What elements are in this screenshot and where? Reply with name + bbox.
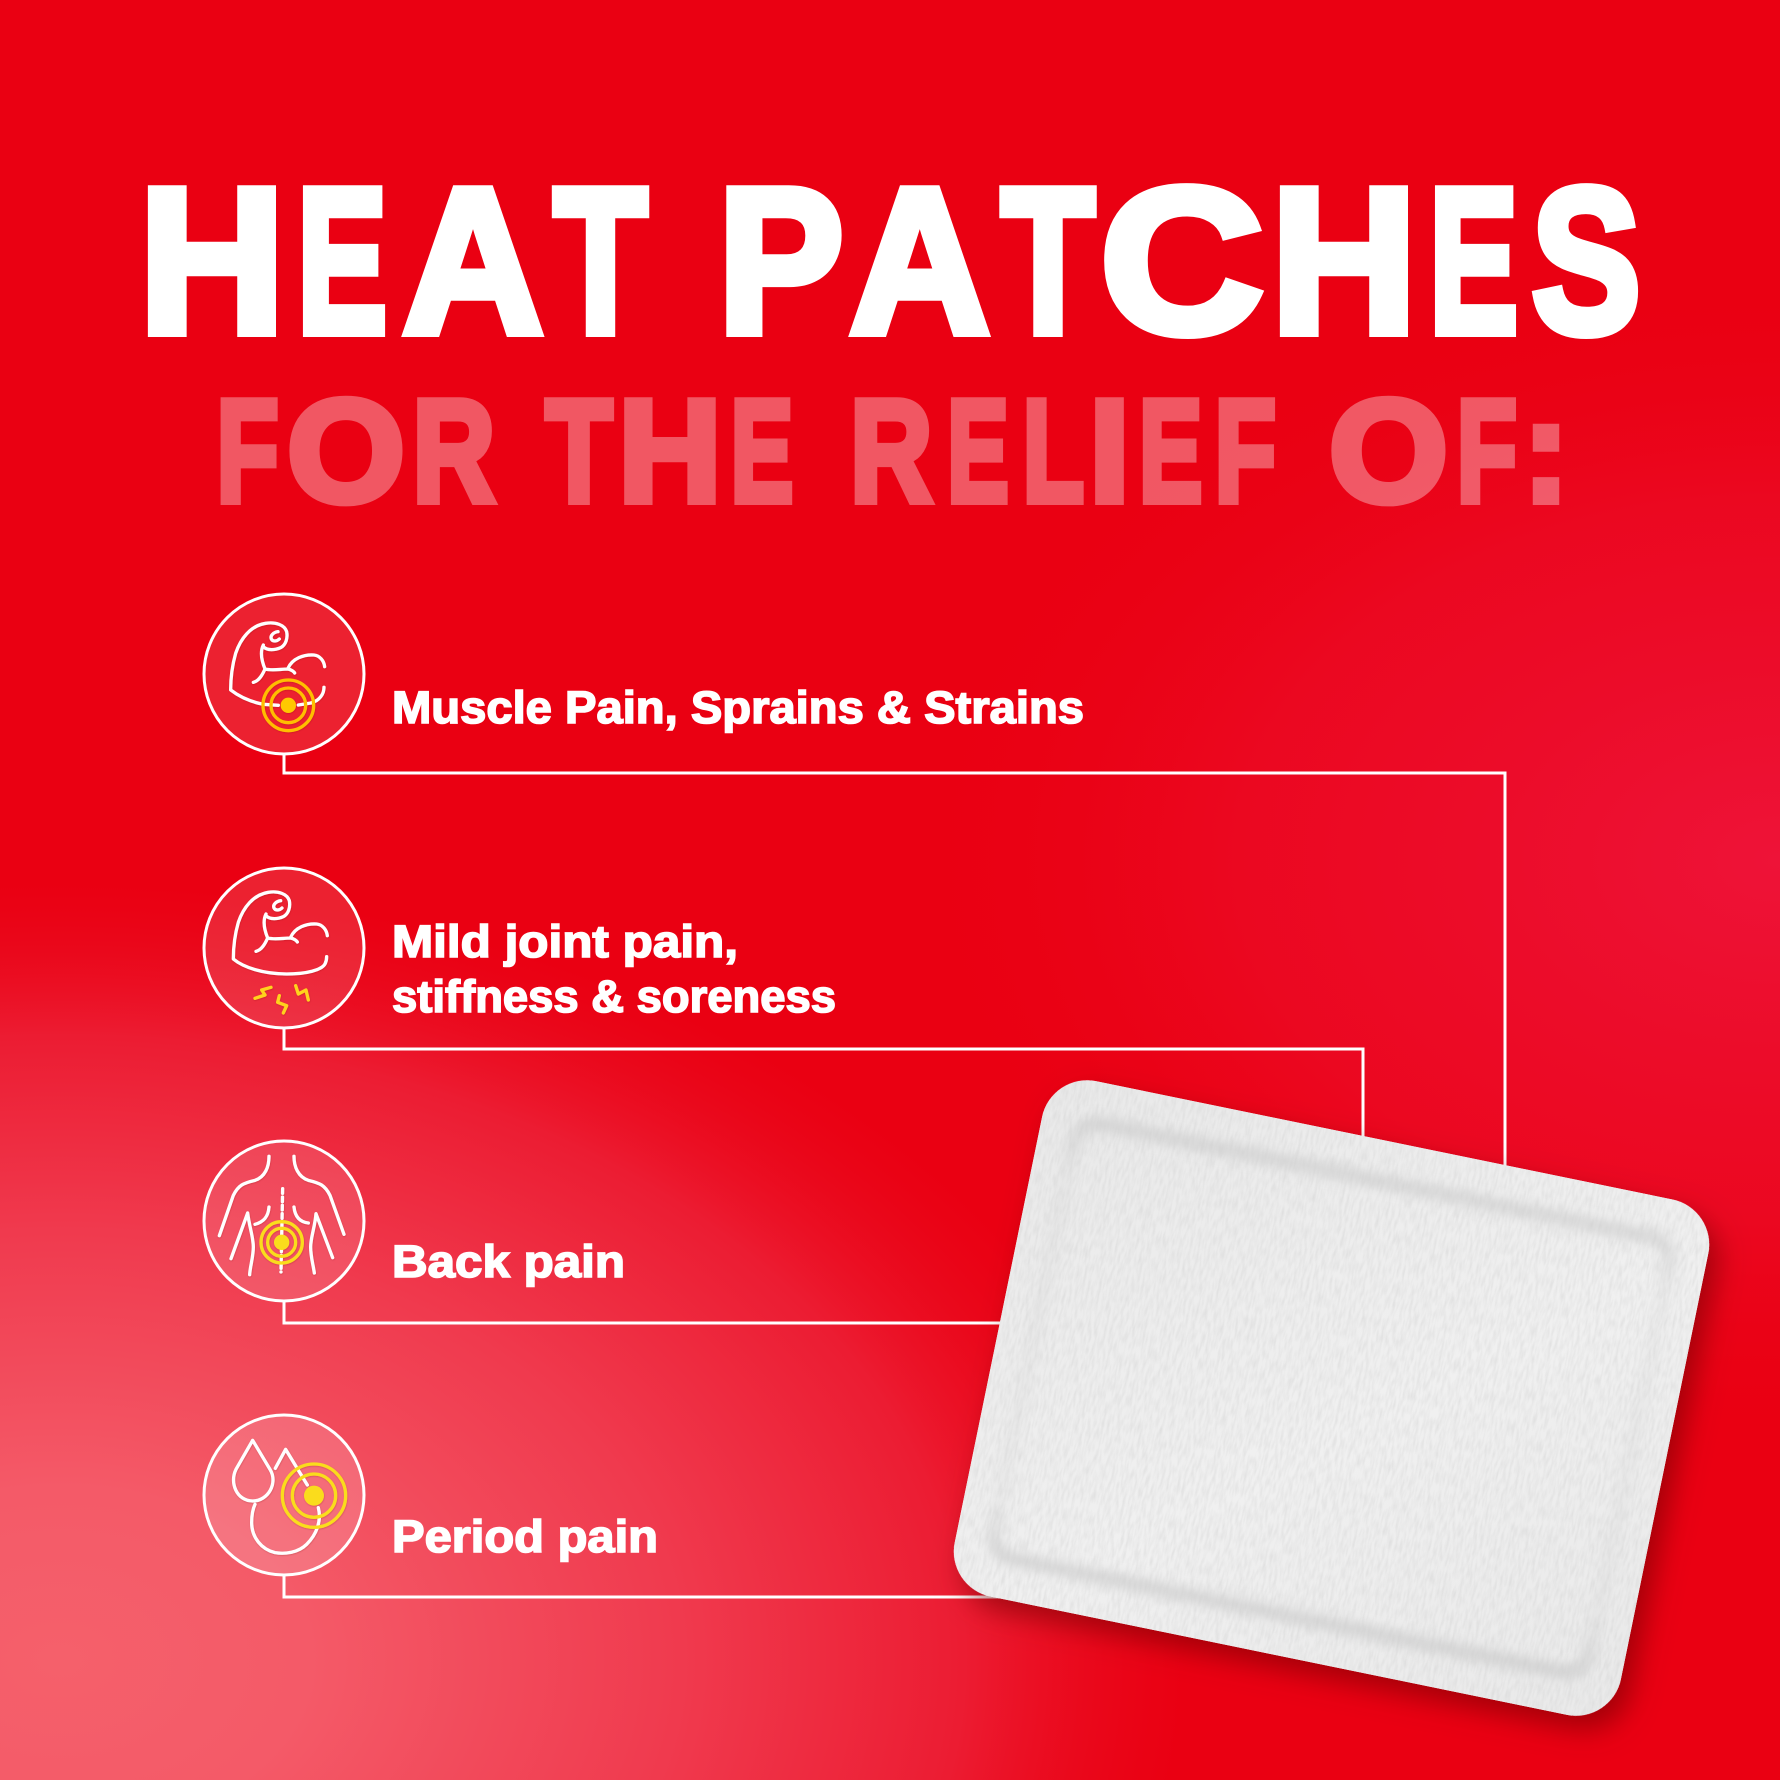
subtitle: for the relief of: T [546,370,612,532]
subtitle: for the relief of: I [1090,370,1130,532]
subtitle: for the relief of: E [731,370,793,532]
label: mild joint pain: Mild joint pain, [392,916,738,967]
icon: muscle with bolts [204,868,364,1028]
subtitle: for the relief of: O [287,370,405,532]
title: heat patches: T [1001,146,1095,376]
title: heat patches: H [139,146,285,376]
icon: back with target [204,1141,364,1301]
icon: drops with target [204,1415,364,1575]
subtitle: for the relief of: F [1215,370,1276,532]
label: mild joint pain [392,916,836,1022]
label: period pain: Period pain [392,1511,658,1562]
connector: period pain to patch [284,1575,1010,1597]
subtitle: for the relief of: F [217,370,279,532]
title: heat patches: S [1532,146,1640,376]
subtitle: for the relief of: : [1524,370,1568,532]
title: heat patches: H [1271,146,1417,376]
subtitle: for the relief of: E [947,370,1009,532]
title: heat patches: E [1429,146,1518,376]
subtitle: for the relief of: O [1329,370,1448,532]
connector: back pain to patch [284,1302,1010,1323]
title: heat patches: A [850,146,990,376]
subtitle: for the relief of: R [850,370,932,532]
subtitle: for the relief of: L [1023,370,1084,532]
heat patch [946,1072,1717,1724]
subtitle: for the relief of: F [1457,370,1517,532]
label: back pain: Back pain [392,1236,625,1287]
title: heat patches: A [403,146,543,376]
subtitle: for the relief of: H [619,370,721,532]
title: heat patches: E [297,146,387,376]
title: heat patches: P [718,146,844,376]
subtitle: for the relief of [217,370,1569,532]
connector: muscle pain to patch [284,755,1505,1170]
label: muscle pain: Muscle Pain, Sprains & Strains [392,682,1084,733]
label: mild joint pain: stiffness & soreness [392,971,836,1022]
connector: joint pain to patch [284,1028,1363,1140]
title: heat patches: C [1100,146,1263,376]
icon: muscle with target [204,594,364,754]
title: heat patches: T [554,146,647,376]
subtitle: for the relief of: E [1139,370,1202,532]
subtitle: for the relief of: R [413,370,495,532]
